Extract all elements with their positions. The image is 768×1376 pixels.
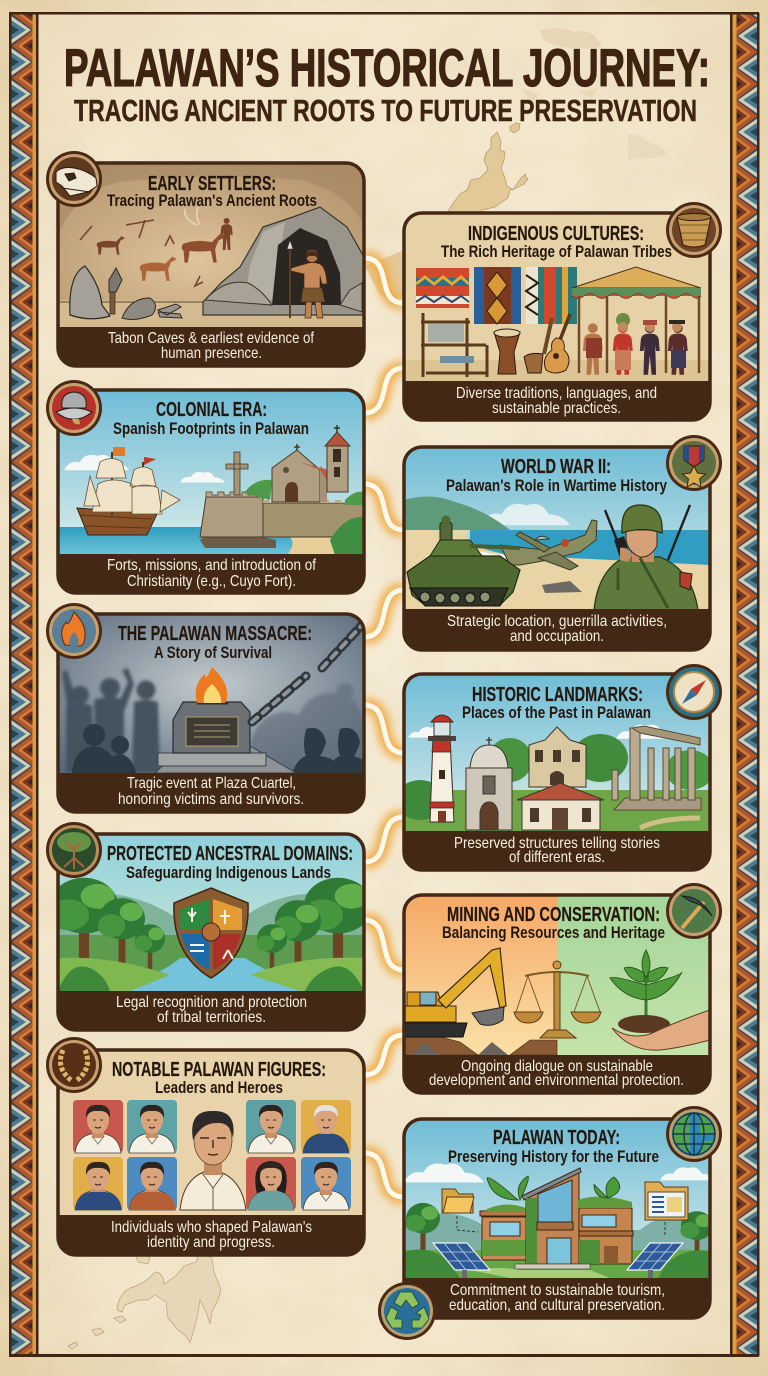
connectors: glowing path between panels bbox=[364, 258, 404, 1197]
icon: woven basket bbox=[666, 202, 722, 258]
panel: early settlers bbox=[46, 151, 364, 366]
decorative background map: northern islands bbox=[365, 28, 667, 298]
icon: laurel wreath bbox=[46, 1037, 102, 1093]
heading: COLONIAL ERA: bbox=[156, 399, 267, 421]
caption bbox=[107, 557, 316, 590]
caption bbox=[449, 1282, 665, 1314]
panel: protected ancestral domains bbox=[46, 822, 372, 1030]
border: right woven band bbox=[730, 13, 760, 1356]
panel: the palawan massacre bbox=[46, 603, 366, 812]
caption: Preserved structures telling stories bbox=[454, 835, 660, 852]
icon: medal bbox=[666, 435, 722, 491]
heading bbox=[113, 399, 309, 438]
caption bbox=[108, 330, 314, 362]
caption: development and environmental protection. bbox=[429, 1072, 684, 1089]
heading: WORLD WAR II: bbox=[501, 456, 611, 478]
icon: globe bbox=[666, 1106, 722, 1162]
caption: and occupation. bbox=[510, 628, 604, 645]
caption: Strategic location, guerrilla activities, bbox=[447, 613, 667, 630]
icon: skull bbox=[46, 151, 102, 207]
border: left woven band bbox=[9, 13, 38, 1356]
panel: mining and conservation bbox=[404, 883, 722, 1093]
caption bbox=[118, 775, 304, 808]
caption: Legal recognition and protection bbox=[116, 994, 307, 1011]
caption: Individuals who shaped Palawan's bbox=[111, 1219, 312, 1236]
heading: Tracing Palawan's Ancient Roots bbox=[107, 192, 317, 210]
heading bbox=[448, 1127, 659, 1166]
icon: tree of life bbox=[46, 822, 102, 878]
caption: Commitment to sustainable tourism, bbox=[450, 1282, 665, 1299]
panel: indigenous cultures bbox=[404, 202, 722, 420]
heading bbox=[441, 223, 672, 261]
decorative background map: southern islands bbox=[68, 1252, 221, 1349]
heading bbox=[107, 843, 353, 882]
heading: PALAWAN TODAY: bbox=[493, 1127, 620, 1149]
heading: Leaders and Heroes bbox=[155, 1079, 283, 1097]
icon: flame bbox=[46, 603, 102, 659]
caption: sustainable practices. bbox=[492, 400, 621, 417]
panel: notable palawan figures bbox=[46, 1037, 364, 1255]
caption: Diverse traditions, languages, and bbox=[456, 385, 657, 402]
caption: Tabon Caves & earliest evidence of bbox=[108, 330, 314, 347]
caption: honoring victims and survivors. bbox=[118, 791, 304, 808]
heading: HISTORIC LANDMARKS: bbox=[472, 684, 643, 706]
caption bbox=[429, 1058, 684, 1089]
caption: Ongoing dialogue on sustainable bbox=[461, 1058, 653, 1075]
caption: of different eras. bbox=[509, 849, 605, 866]
heading: The Rich Heritage of Palawan Tribes bbox=[441, 243, 672, 261]
caption bbox=[454, 835, 660, 866]
caption: of tribal territories. bbox=[157, 1009, 266, 1026]
heading: Balancing Resources and Heritage bbox=[442, 924, 665, 942]
caption bbox=[447, 613, 667, 645]
caption: human presence. bbox=[161, 345, 262, 362]
heading: Palawan's Role in Wartime History bbox=[446, 477, 668, 495]
heading bbox=[442, 904, 665, 942]
caption: education, and cultural preservation. bbox=[449, 1297, 665, 1314]
heading bbox=[112, 1059, 326, 1097]
caption: Christianity (e.g., Cuyo Fort). bbox=[127, 573, 296, 590]
heading: Safeguarding Indigenous Lands bbox=[126, 864, 331, 882]
panel: colonial era bbox=[46, 380, 367, 593]
icon: compass bbox=[666, 664, 722, 720]
panel: historic landmarks bbox=[396, 664, 722, 870]
heading bbox=[118, 623, 312, 662]
heading bbox=[446, 456, 668, 495]
panel: palawan today bbox=[404, 1106, 722, 1318]
portrait grid bbox=[73, 1100, 351, 1210]
heading bbox=[107, 173, 317, 210]
heading: THE PALAWAN MASSACRE: bbox=[118, 623, 312, 645]
caption: identity and progress. bbox=[147, 1234, 275, 1251]
heading: Preserving History for the Future bbox=[448, 1148, 659, 1166]
heading bbox=[462, 684, 651, 722]
caption bbox=[116, 994, 307, 1026]
panel: world war ii bbox=[404, 435, 722, 650]
heading: Places of the Past in Palawan bbox=[462, 704, 651, 722]
heading: A Story of Survival bbox=[154, 644, 272, 662]
heading: EARLY SETTLERS: bbox=[148, 173, 276, 195]
icon: pickaxe bbox=[666, 883, 722, 939]
caption: Tragic event at Plaza Cuartel, bbox=[127, 775, 296, 792]
heading: PROTECTED ANCESTRAL DOMAINS: bbox=[107, 843, 353, 865]
heading: Spanish Footprints in Palawan bbox=[113, 420, 309, 438]
caption bbox=[111, 1219, 312, 1251]
caption: Forts, missions, and introduction of bbox=[107, 557, 316, 574]
icon: recycle badge bbox=[378, 1282, 436, 1340]
heading: MINING AND CONSERVATION: bbox=[447, 904, 660, 926]
caption bbox=[456, 385, 657, 417]
icon: conquistador helmet bbox=[46, 380, 102, 436]
title bbox=[64, 39, 710, 128]
heading: NOTABLE PALAWAN FIGURES: bbox=[112, 1059, 326, 1081]
heading: INDIGENOUS CULTURES: bbox=[468, 223, 644, 245]
